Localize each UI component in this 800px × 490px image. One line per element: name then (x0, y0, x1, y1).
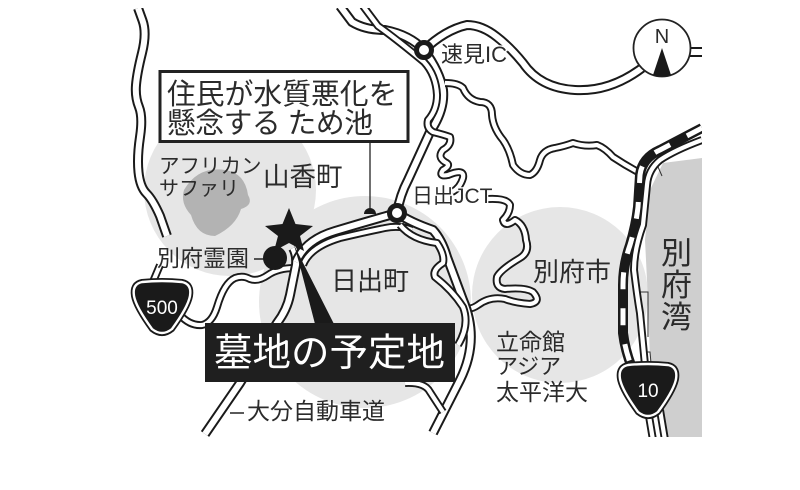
icon: route 500 shield (134, 281, 190, 333)
callout: residents concerned about water quality (160, 72, 408, 142)
road: Hayami IC to compass (424, 25, 642, 90)
icon: Hiji JCT marker (390, 206, 404, 220)
road: winding road north to south (363, 6, 463, 192)
heading: planned cemetery site (205, 323, 455, 382)
label: Beppu Bay (661, 236, 692, 335)
label: Africa Safari: アフリカン (159, 155, 262, 178)
label: Hayami IC: 速見IC (441, 42, 507, 67)
callout: residents concerned about water quality: 懸念する ため池 (167, 108, 373, 140)
label: Hiji JCT: 日出JCT (412, 185, 493, 208)
railway along coast (623, 128, 702, 368)
callout: residents concerned about water quality: 住民が水質悪化を (167, 79, 397, 111)
label: Beppu Bay: 別 (661, 236, 692, 271)
road: Oita expressway west (205, 248, 296, 434)
label: Ritsumeikan Asia Pacific University: 太平洋大 (496, 379, 588, 405)
icon: star site marker with pointer (265, 208, 334, 324)
road: stub east of compass (688, 51, 702, 53)
label: Beppu city: 別府市 (533, 257, 611, 287)
icon: cemetery dot with leader (254, 246, 287, 270)
icon: route 10 shield: 10 (637, 381, 659, 402)
road: winding road through Beppu (462, 199, 537, 308)
area: Beppu Bay (645, 158, 702, 437)
road: left north-south road (136, 8, 167, 236)
area: Hiji town (259, 196, 471, 408)
icon: north compass (634, 20, 690, 76)
label: Africa Safari (159, 155, 262, 200)
road: section below label (405, 383, 443, 412)
icon: Hayami IC marker (416, 42, 432, 58)
road: short section to route 500 (152, 265, 160, 284)
road: Hiji JCT to Hayami IC (340, 6, 443, 213)
road: railway south (660, 410, 665, 440)
leader line to reservoir (364, 142, 376, 214)
label: Hiji town: 日出町 (331, 266, 409, 296)
icon: north compass: N (655, 26, 669, 48)
map (136, 6, 702, 440)
coast details (640, 160, 662, 363)
label: Oita expressway: 大分自動車道 (247, 398, 385, 424)
road: route 10 (634, 140, 702, 365)
area: Yamaga town (144, 142, 316, 276)
road: route 10 south (648, 410, 653, 440)
label: Yamaga town: 山香町 (263, 162, 342, 192)
label: Ritsumeikan Asia Pacific University: 立命館 (496, 329, 565, 355)
road: expressway south from JCT (397, 213, 471, 433)
area: Africa Safari (183, 169, 250, 236)
area: Beppu city (472, 207, 648, 383)
label: Beppu Bay: 湾 (661, 300, 692, 335)
label: Ritsumeikan Asia Pacific University (496, 329, 588, 405)
road: route 500 (180, 268, 295, 325)
label: Africa Safari: サファリ (159, 178, 239, 200)
road: expressway to Hiji JCT (296, 213, 397, 262)
road: winding road to coast (445, 83, 638, 175)
icon: route 10 shield (620, 364, 676, 416)
road: parallel road near Hiji JCT (303, 227, 412, 265)
icon: route 500 shield: 500 (146, 298, 178, 319)
heading: planned cemetery site: 墓地の予定地 (214, 332, 445, 375)
label: Beppu cemetery: 別府霊園 (157, 245, 249, 271)
label: Ritsumeikan Asia Pacific University: アジア (496, 354, 561, 379)
road: inner road near JCT (400, 225, 466, 345)
label: Beppu Bay: 府 (661, 268, 692, 303)
